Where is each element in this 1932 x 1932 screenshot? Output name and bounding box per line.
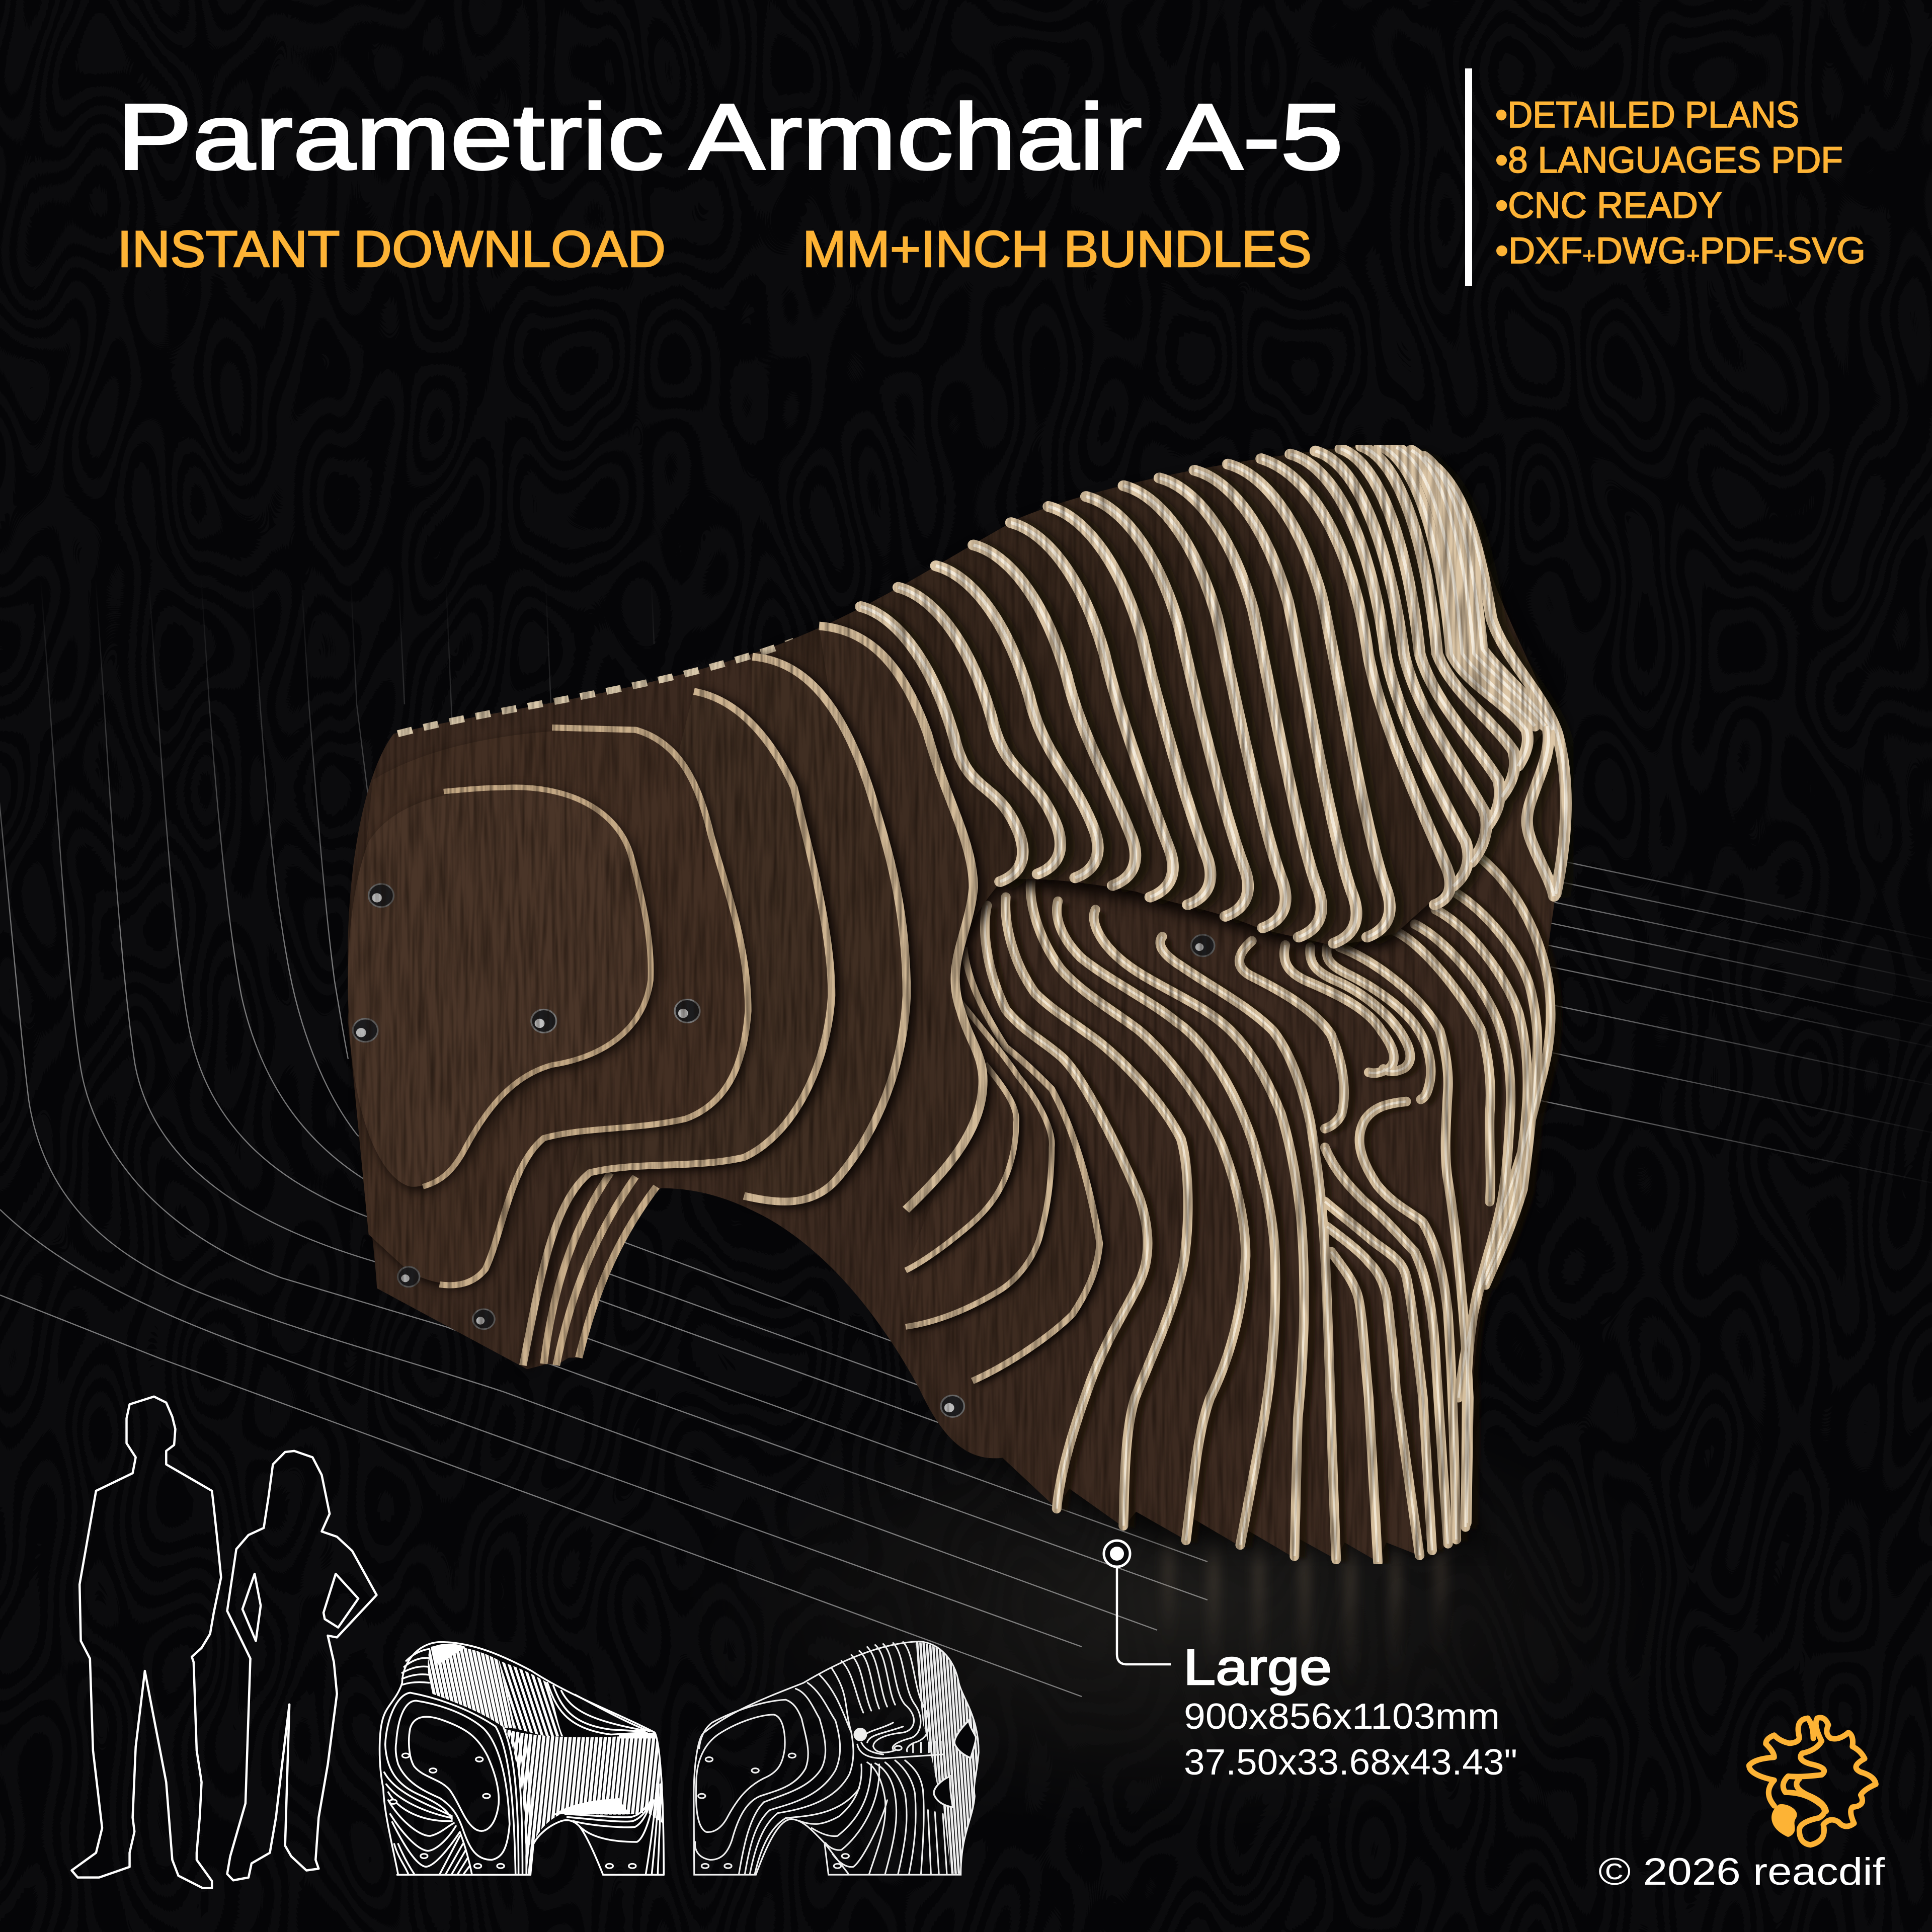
parametric armchair render xyxy=(348,445,1573,1564)
callout marker and leader xyxy=(1104,1541,1171,1664)
imperial dimensions: 37.50x33.68x43.43" xyxy=(1184,1742,1517,1783)
upper slat edges: shadow pass xyxy=(868,448,1573,945)
left leg slats xyxy=(544,1173,657,1365)
tier panel r xyxy=(906,1001,1052,1327)
metric dimensions: 900x856x1103mm xyxy=(1184,1697,1500,1737)
title: Parametric Armchair A-5 xyxy=(117,85,1343,189)
floor reflection of the chair feet xyxy=(1162,1550,1447,1685)
front panel edge xyxy=(423,787,651,1187)
icon: chair line drawing, side view xyxy=(694,1641,979,1875)
lower stripes group xyxy=(906,855,1557,1564)
armchair floor shadow xyxy=(956,1439,1489,1545)
lower slat highlights xyxy=(985,855,1551,1562)
icon: woman silhouette xyxy=(227,1451,376,1880)
chair body silhouette xyxy=(348,445,1566,1562)
right side guide lines xyxy=(1535,855,1932,1183)
ridge slat tips xyxy=(398,641,794,734)
feature: languages: •8 LANGUAGES PDF xyxy=(1495,140,1843,181)
slat panel 4 xyxy=(744,657,907,1201)
armrest opening face xyxy=(1478,727,1562,928)
subtitle: instant download: INSTANT DOWNLOAD xyxy=(117,220,666,278)
icon: chair line drawing, back view xyxy=(380,1642,664,1875)
feature: CNC: •CNC READY xyxy=(1495,185,1722,226)
size label: Large xyxy=(1183,1639,1332,1696)
slat panel 5 xyxy=(819,626,983,1210)
front panel xyxy=(348,787,651,1187)
lower slat edges: shadow pass xyxy=(991,857,1557,1564)
perspective guide lines xyxy=(0,503,1208,1697)
lower slat edges xyxy=(985,855,1551,1562)
feature list xyxy=(1495,95,1866,271)
floor glow xyxy=(604,1369,1761,1852)
bolts xyxy=(353,884,1215,1417)
slat panel 2 fill xyxy=(348,730,748,1284)
feature: file formats: •DXF+DWG+PDF+SVG xyxy=(1495,230,1866,271)
icon: human scale silhouettes xyxy=(71,1397,376,1888)
feature: detailed plans: •DETAILED PLANS xyxy=(1495,95,1799,135)
vertical divider xyxy=(1465,68,1472,286)
upper slat highlights xyxy=(861,446,1566,943)
copyright: © 2026 reacdif xyxy=(1598,1850,1885,1893)
upper back band xyxy=(777,445,1557,957)
tier panel s xyxy=(906,1064,1016,1270)
slat panel 3 xyxy=(523,691,832,1365)
upper slat edges xyxy=(861,446,1566,943)
logo xyxy=(1749,1718,1876,1845)
icon: man silhouette xyxy=(71,1397,221,1888)
subtitle: mm and inch bundles: MM+INCH BUNDLES xyxy=(802,220,1312,278)
tier panel q xyxy=(964,947,1100,1381)
slat panel 2 edge xyxy=(440,728,748,1285)
